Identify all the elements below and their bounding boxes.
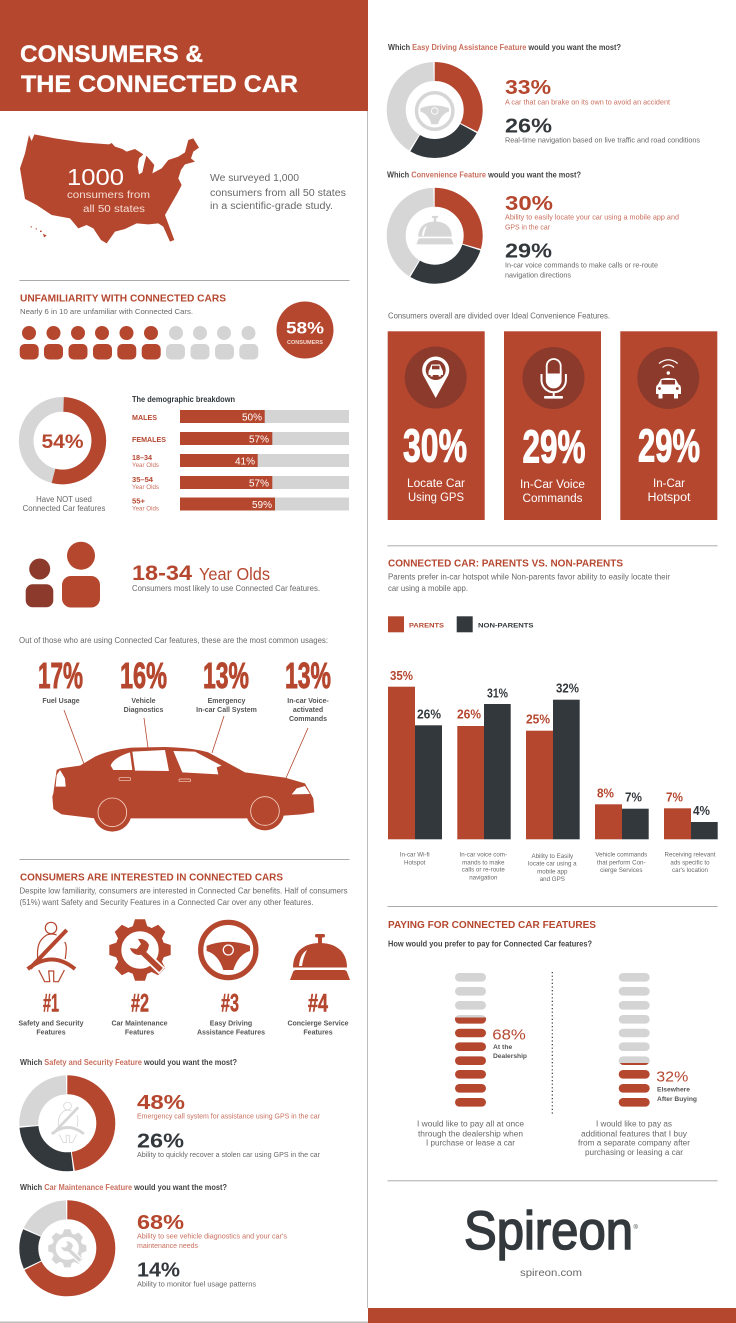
usage percentages: activated — [293, 707, 323, 714]
stats: easy driving — [505, 77, 701, 145]
callout: 18-34 year olds — [132, 562, 320, 593]
heading: unfamiliarity: UNFAMILIARITY WITH CONNECTED CARS — [20, 292, 226, 304]
bar chart: parents vs non-parents: 32% — [556, 682, 579, 696]
usage percentages: Diagnostics — [124, 707, 163, 714]
callout: 58% consumers: CONSUMERS — [287, 340, 324, 346]
stats: easy driving: A car that can brake on its own to avoid an accident — [505, 99, 670, 106]
callout: 18-34 year olds: 18-34 — [132, 562, 192, 585]
bar chart: parents vs non-parents — [388, 669, 718, 883]
bar chart: parents vs non-parents: In-car Wi-fi — [400, 852, 430, 859]
ranked feature: #1 safety and security: Features — [36, 1030, 66, 1037]
bar chart: parents vs non-parents: 7% — [666, 791, 683, 805]
map of the United States with survey count: consumers from — [67, 190, 150, 201]
callout: 18-34 year olds: Consumers most likely to use Connected Car features. — [132, 584, 320, 593]
card: locate car using GPS: Locate Car — [407, 478, 465, 490]
card: in-car hotspot — [620, 331, 717, 520]
question: car maintenance: Which Car Maintenance Feature would you want the most? — [20, 1183, 227, 1192]
callout: 18-34 year olds: Year Olds — [199, 564, 270, 584]
ranked feature: #4 concierge — [287, 934, 350, 1037]
chart legend — [388, 616, 534, 632]
demographic breakdown bars — [132, 395, 349, 512]
usage percentages: In-car Call System — [196, 707, 257, 714]
bar chart: parents vs non-parents: 4% — [693, 804, 710, 818]
bar chart: parents vs non-parents: Vehicle commands — [595, 852, 647, 859]
bar chart: parents vs non-parents: locate car using a — [528, 861, 577, 868]
bar chart: parents vs non-parents: mobile app — [537, 868, 568, 875]
donut: convenience — [396, 197, 473, 274]
people pictogram: 6 of 10 — [20, 326, 258, 360]
interest paragraph: Despite low familiarity, consumers are interested in Connected Car benefits. Half of consumers — [20, 886, 348, 896]
pill gauge: 32% elsewhere: After Buying — [657, 1096, 697, 1103]
stats: convenience — [505, 193, 679, 279]
stats: safety and security: Ability to quickly recover a stolen car using GPS in the car — [137, 1152, 321, 1159]
survey description — [210, 173, 346, 212]
caption: pay at dealership: through the dealership when — [418, 1129, 523, 1138]
stats: safety and security: 48% — [137, 1092, 185, 1114]
caption: pay elsewhere: I would like to pay as — [596, 1120, 672, 1129]
pill gauge: 32% elsewhere: 32% — [656, 1069, 688, 1086]
car silhouette with callout lines — [52, 710, 314, 832]
Spireon logo: Spireon — [464, 1201, 633, 1261]
dotted separator — [551, 972, 553, 1116]
card: in-car hotspot: 29% — [638, 420, 700, 472]
donut: easy driving — [396, 72, 473, 148]
bar chart: parents vs non-parents: 8% — [597, 786, 614, 800]
heading: consumers interested: CONSUMERS ARE INTERESTED IN CONNECTED CARS — [20, 872, 283, 884]
map of the United States with survey count — [20, 134, 199, 243]
usage percentages: 13% — [203, 655, 249, 696]
stats: car maintenance: Ability to see vehicle diagnostics and your car's — [137, 1234, 288, 1241]
stats: safety and security: 26% — [137, 1131, 184, 1153]
question: convenience: Which Convenience Feature would you want the most? — [387, 170, 581, 179]
usage intro text: Out of those who are using Connected Car features, these are the most common usages: — [19, 636, 328, 645]
parents paragraph: Parents prefer in-car hotspot while Non-parents favor ability to easily locate their — [388, 572, 670, 581]
usage percentages: Vehicle — [131, 698, 156, 705]
donut chart: 54% have not used: Have NOT used — [36, 495, 92, 504]
ranked feature: #2 car maintenance: #2 — [131, 990, 149, 1018]
ranked feature: #1 safety and security — [19, 922, 84, 1037]
bar chart: parents vs non-parents: that perform Con- — [597, 859, 646, 866]
heading: paying: PAYING FOR CONNECTED CAR FEATURES — [388, 919, 596, 931]
card: locate car using GPS: Using GPS — [408, 492, 464, 504]
bar chart: parents vs non-parents: 26% — [457, 707, 481, 721]
usage percentages: 17% — [38, 655, 83, 696]
demographic breakdown bars: 18–34 — [132, 455, 152, 462]
ranked feature: #3 easy driving: Assistance Features — [197, 1030, 265, 1037]
demographic breakdown bars: FEMALES — [132, 437, 166, 444]
stats: convenience: 30% — [505, 193, 553, 215]
demographic breakdown bars: 59% — [252, 500, 272, 511]
ranked feature: #3 easy driving — [197, 922, 265, 1037]
ranked feature: #2 car maintenance: Car Maintenance — [111, 1021, 168, 1028]
usage percentages — [38, 655, 331, 723]
title banner: THE CONNECTED CAR — [21, 71, 298, 98]
pill gauge: 32% elsewhere: Elsewhere — [657, 1087, 690, 1094]
card: in-car voice commands: In-Car Voice — [520, 479, 585, 491]
demographic breakdown bars: 41% — [235, 456, 255, 468]
caption: pay elsewhere: additional features that I buy — [581, 1129, 687, 1138]
footer bar — [368, 1308, 736, 1323]
bar chart: parents vs non-parents: 35% — [390, 669, 413, 683]
card: locate car using GPS: 30% — [403, 420, 467, 472]
demographic breakdown bars: Year Olds — [132, 485, 159, 491]
donut chart: 54% have not used: Connected Car features — [23, 504, 105, 513]
bar chart: parents vs non-parents: In-car voice com- — [460, 852, 507, 859]
chart legend: NON-PARENTS — [478, 623, 534, 630]
bar chart: parents vs non-parents: Ability to Easily — [531, 853, 574, 860]
demographic breakdown bars: Year Olds — [132, 506, 159, 512]
pill gauge: 68% at the dealership: 68% — [492, 1026, 526, 1043]
callout: 58% consumers — [276, 302, 334, 358]
survey description: consumers from all 50 states — [210, 188, 346, 199]
card: in-car hotspot: Hotspot — [648, 492, 691, 504]
demographic breakdown bars: 35–54 — [132, 477, 153, 484]
bar chart: parents vs non-parents: calls or re-route — [462, 867, 505, 874]
bar chart: parents vs non-parents: Hotspot — [404, 859, 426, 866]
ranked feature: #3 easy driving: Easy Driving — [210, 1021, 252, 1028]
left column divider — [0, 111, 368, 1323]
bar chart: parents vs non-parents: car's location — [672, 867, 709, 874]
ranked feature: #4 concierge: #4 — [308, 990, 328, 1018]
bar chart: parents vs non-parents: mands to make — [462, 859, 505, 866]
title banner: CONSUMERS & — [20, 41, 203, 68]
stats: car maintenance: maintenance needs — [137, 1243, 198, 1250]
ranked feature: #4 concierge: Features — [303, 1030, 333, 1037]
stats: car maintenance: Ability to monitor fuel usage patterns — [137, 1282, 257, 1289]
ranked feature: #2 car maintenance — [109, 919, 171, 1037]
bar chart: parents vs non-parents: cierge Services — [600, 867, 642, 874]
caption: pay at dealership — [417, 1120, 525, 1148]
interest paragraph — [20, 886, 348, 907]
bar chart: parents vs non-parents: 26% — [417, 707, 441, 721]
stats: safety and security — [137, 1092, 321, 1159]
ranked feature: #2 car maintenance: Features — [125, 1030, 154, 1037]
title banner — [0, 0, 368, 111]
Spireon logo: ® — [634, 1224, 638, 1231]
caption: pay elsewhere — [578, 1120, 690, 1157]
map of the United States with survey count: 1000 — [67, 164, 124, 190]
demographic breakdown bars: 57% — [249, 478, 269, 490]
usage percentages: 13% — [285, 655, 331, 696]
question: safety and security: Which Safety and Security Feature would you want the most? — [20, 1058, 237, 1067]
usage percentages: Fuel Usage — [42, 698, 80, 705]
demographic breakdown bars: 50% — [242, 412, 262, 424]
pill gauge: 68% at the dealership: At the — [493, 1044, 512, 1051]
pill gauge: 32% elsewhere — [619, 973, 697, 1107]
demographic breakdown bars: The demographic breakdown — [132, 395, 235, 404]
stats: convenience: Ability to easily locate your car using a mobile app and — [505, 215, 679, 222]
caption: pay elsewhere: from a separate company after — [578, 1139, 690, 1148]
ranked feature: #4 concierge: Concierge Service — [287, 1021, 349, 1028]
demographic breakdown bars: 57% — [249, 434, 269, 446]
stats: car maintenance: 68% — [137, 1212, 184, 1234]
ranked feature: #3 easy driving: #3 — [221, 990, 239, 1018]
unfamiliarity subtext: Nearly 6 in 10 are unfamiliar with Connected Cars. — [20, 307, 193, 316]
caption: pay at dealership: I purchase or lease a car — [426, 1139, 515, 1148]
map of the United States with survey count: all 50 states — [83, 204, 145, 215]
ranked feature: #1 safety and security: #1 — [43, 990, 59, 1018]
stats: car maintenance: 14% — [137, 1260, 180, 1282]
stats: convenience: In-car voice commands to make calls or re-route — [505, 263, 658, 270]
card: in-car voice commands: 29% — [522, 420, 586, 472]
card: in-car voice commands — [504, 331, 601, 520]
parents paragraph — [388, 572, 670, 593]
donut chart: 54% have not used: 54% — [42, 432, 84, 453]
heading: parents vs non-parents: CONNECTED CAR: PARENTS VS. NON-PARENTS — [388, 557, 623, 569]
usage percentages: Emergency — [208, 698, 245, 705]
parents paragraph: car using a mobile app. — [388, 584, 468, 593]
bar chart: parents vs non-parents: 7% — [625, 791, 642, 805]
usage percentages: In-car Voice- — [287, 698, 329, 705]
caption: pay at dealership: I would like to pay all at once — [417, 1120, 525, 1129]
question: easy driving: Which Easy Driving Assistance Feature would you want the most? — [388, 43, 621, 52]
callout: 58% consumers: 58% — [286, 320, 324, 338]
bar chart: parents vs non-parents: 31% — [487, 686, 508, 700]
demographic breakdown bars: MALES — [132, 415, 157, 422]
donut: car maintenance — [29, 1210, 106, 1287]
card: in-car voice commands: Commands — [522, 493, 583, 505]
interest paragraph: (51%) want Safety and Security Features in a Connected Car over any other features. — [20, 898, 314, 907]
stats: easy driving: 33% — [505, 77, 551, 99]
bar chart: parents vs non-parents: Receiving relevant — [665, 852, 716, 859]
demographic breakdown bars: Year Olds — [132, 463, 159, 469]
paying question: How would you prefer to pay for Connected Car features? — [388, 940, 592, 949]
Spireon logo: spireon.com — [520, 1267, 582, 1279]
bar chart: parents vs non-parents: 25% — [526, 712, 550, 726]
stats: easy driving: Real-time navigation based on live traffic and road conditions — [505, 138, 701, 145]
chart legend: PARENTS — [409, 623, 444, 630]
stats: car maintenance — [137, 1212, 288, 1289]
caption: pay elsewhere: purchasing or leasing a car — [585, 1148, 683, 1157]
survey description: in a scientific-grade study. — [210, 201, 333, 212]
card: in-car hotspot: In-Car — [653, 478, 685, 490]
stats: convenience: 29% — [505, 241, 552, 263]
icon: two people — [26, 542, 100, 608]
ideal convenience intro: Consumers overall are divided over Ideal Convenience Features. — [388, 311, 610, 320]
donut chart: 54% have not used — [23, 404, 105, 513]
ranked feature: #1 safety and security: Safety and Security — [19, 1021, 84, 1028]
bar chart: parents vs non-parents: ads specific to — [670, 859, 710, 866]
pill gauge: 68% at the dealership: Dealership — [493, 1053, 527, 1060]
usage percentages: 16% — [120, 655, 167, 696]
bar chart: parents vs non-parents: navigation — [469, 874, 498, 881]
stats: safety and security: Emergency call system for assistance using GPS in the car — [137, 1114, 321, 1120]
card: locate car using GPS — [388, 331, 485, 520]
survey description: We surveyed 1,000 — [210, 173, 299, 184]
bar chart: parents vs non-parents: and GPS — [540, 876, 565, 883]
stats: convenience: navigation directions — [505, 272, 572, 279]
donut: safety and security — [29, 1085, 106, 1162]
stats: easy driving: 26% — [505, 116, 552, 138]
demographic breakdown bars: 55+ — [132, 498, 145, 506]
pill gauge: 68% at the dealership — [455, 973, 527, 1107]
stats: convenience: GPS in the car — [505, 225, 551, 232]
usage percentages: Commands — [289, 716, 327, 723]
